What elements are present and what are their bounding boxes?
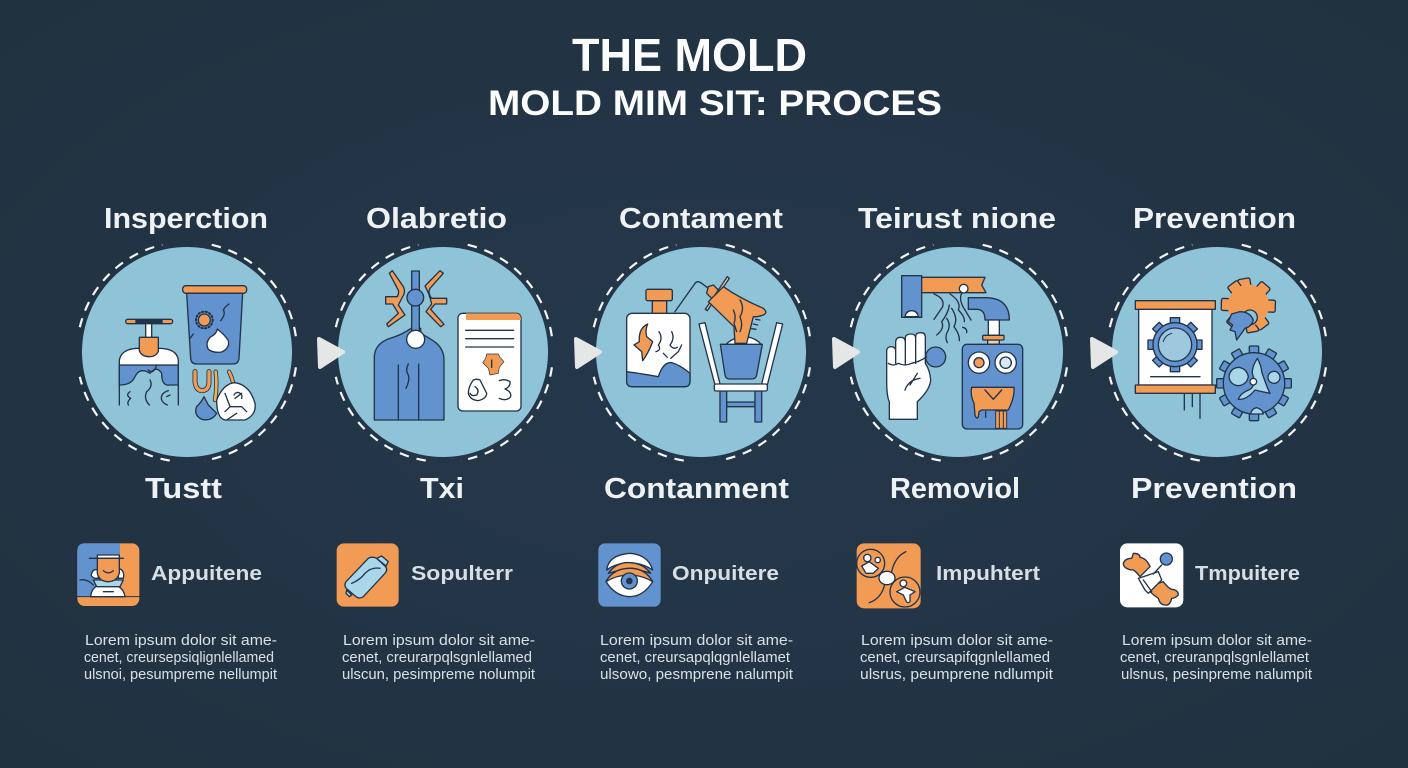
dashed ring bbox=[851, 245, 1067, 461]
heading: Contament bbox=[619, 203, 783, 235]
dashed ring bbox=[336, 245, 552, 461]
body text: Lorem ipsum dolor sit ame- bbox=[1122, 633, 1312, 649]
body text bbox=[860, 633, 1053, 683]
dashed ring bbox=[594, 245, 810, 461]
dashed ring bbox=[80, 245, 296, 461]
dashed ring bbox=[1110, 245, 1326, 461]
step 2: olabretio bbox=[336, 203, 552, 683]
small label: Tmpuitere bbox=[1195, 563, 1300, 585]
body text: cenet, creursepsiqlignlellamed bbox=[84, 650, 274, 666]
icon: hand, pipe and machine bbox=[887, 276, 1023, 429]
small label: Impuhtert bbox=[936, 563, 1040, 585]
body text: ulsowo, pesmprene nalumpit bbox=[600, 667, 793, 683]
body text: Lorem ipsum dolor sit ame- bbox=[343, 633, 535, 649]
icon: banner and gears bbox=[1135, 278, 1291, 421]
icon: body and report bbox=[374, 271, 521, 420]
heading: Olabretio bbox=[366, 203, 507, 235]
step 3: containment bbox=[594, 203, 810, 683]
arrow 3 bbox=[834, 339, 858, 367]
heading: Prevention bbox=[1133, 203, 1296, 235]
circle badge bbox=[338, 247, 548, 457]
body text: Lorem ipsum dolor sit ame- bbox=[861, 633, 1053, 649]
step 1: inspection bbox=[77, 203, 296, 683]
body text: cenet, creursapqlqgnlellamet bbox=[600, 650, 790, 666]
small label: Appuitene bbox=[151, 563, 262, 585]
body text bbox=[342, 633, 535, 683]
step 4: removal bbox=[851, 203, 1067, 683]
small icon: bottle bbox=[337, 543, 399, 607]
circle badge bbox=[596, 247, 806, 457]
caption heading: Prevention bbox=[1131, 473, 1297, 505]
body text: ulscun, pesimpreme nolumpit bbox=[342, 667, 535, 683]
caption heading: Tustt bbox=[145, 473, 222, 505]
arrow 1 bbox=[319, 339, 343, 367]
body text bbox=[84, 633, 277, 683]
arrow 2 bbox=[576, 339, 600, 367]
circle badge bbox=[82, 247, 292, 457]
small icon: people nodes bbox=[857, 543, 921, 608]
heading: Teirust nione bbox=[858, 203, 1056, 235]
small label: Onpuitere bbox=[672, 563, 779, 585]
body text bbox=[1120, 633, 1312, 683]
small icon: worker bbox=[77, 543, 139, 606]
body text: cenet, creursapifqgnlellamed bbox=[860, 650, 1050, 666]
body text: Lorem ipsum dolor sit ame- bbox=[600, 633, 793, 649]
small icon: bone and tool bbox=[1120, 543, 1183, 607]
caption heading: Contanment bbox=[604, 473, 789, 505]
title: MOLD MIM SIT: PROCES bbox=[488, 84, 942, 123]
body text: ulsnoi, pesumpreme nellumpit bbox=[84, 667, 277, 683]
body text: ulsnus, pesinpreme nalumpit bbox=[1121, 667, 1312, 683]
caption heading: Removiol bbox=[890, 473, 1020, 505]
step 5: prevention bbox=[1110, 203, 1326, 683]
circle badge bbox=[853, 247, 1063, 457]
icon: sprayer and bucket bbox=[119, 286, 255, 420]
body text: cenet, creurarpqlsgnlellamed bbox=[342, 650, 532, 666]
arrow 4 bbox=[1092, 339, 1116, 367]
body text bbox=[600, 633, 793, 683]
small icon: eye bbox=[598, 543, 661, 607]
title: THE MOLD bbox=[572, 29, 807, 81]
circle badge bbox=[1112, 247, 1322, 457]
heading: Insperction bbox=[104, 203, 268, 235]
title bbox=[488, 29, 942, 123]
body text: ulsrus, peumprene ndlumpit bbox=[860, 667, 1053, 683]
body text: cenet, creuranpqlsgnlellamet bbox=[1120, 650, 1309, 666]
icon: bottle pouring into bucket on chair bbox=[627, 277, 783, 422]
body text: Lorem ipsum dolor sit ame- bbox=[85, 633, 277, 649]
small label: Sopulterr bbox=[411, 563, 513, 585]
caption heading: Txi bbox=[420, 473, 464, 505]
